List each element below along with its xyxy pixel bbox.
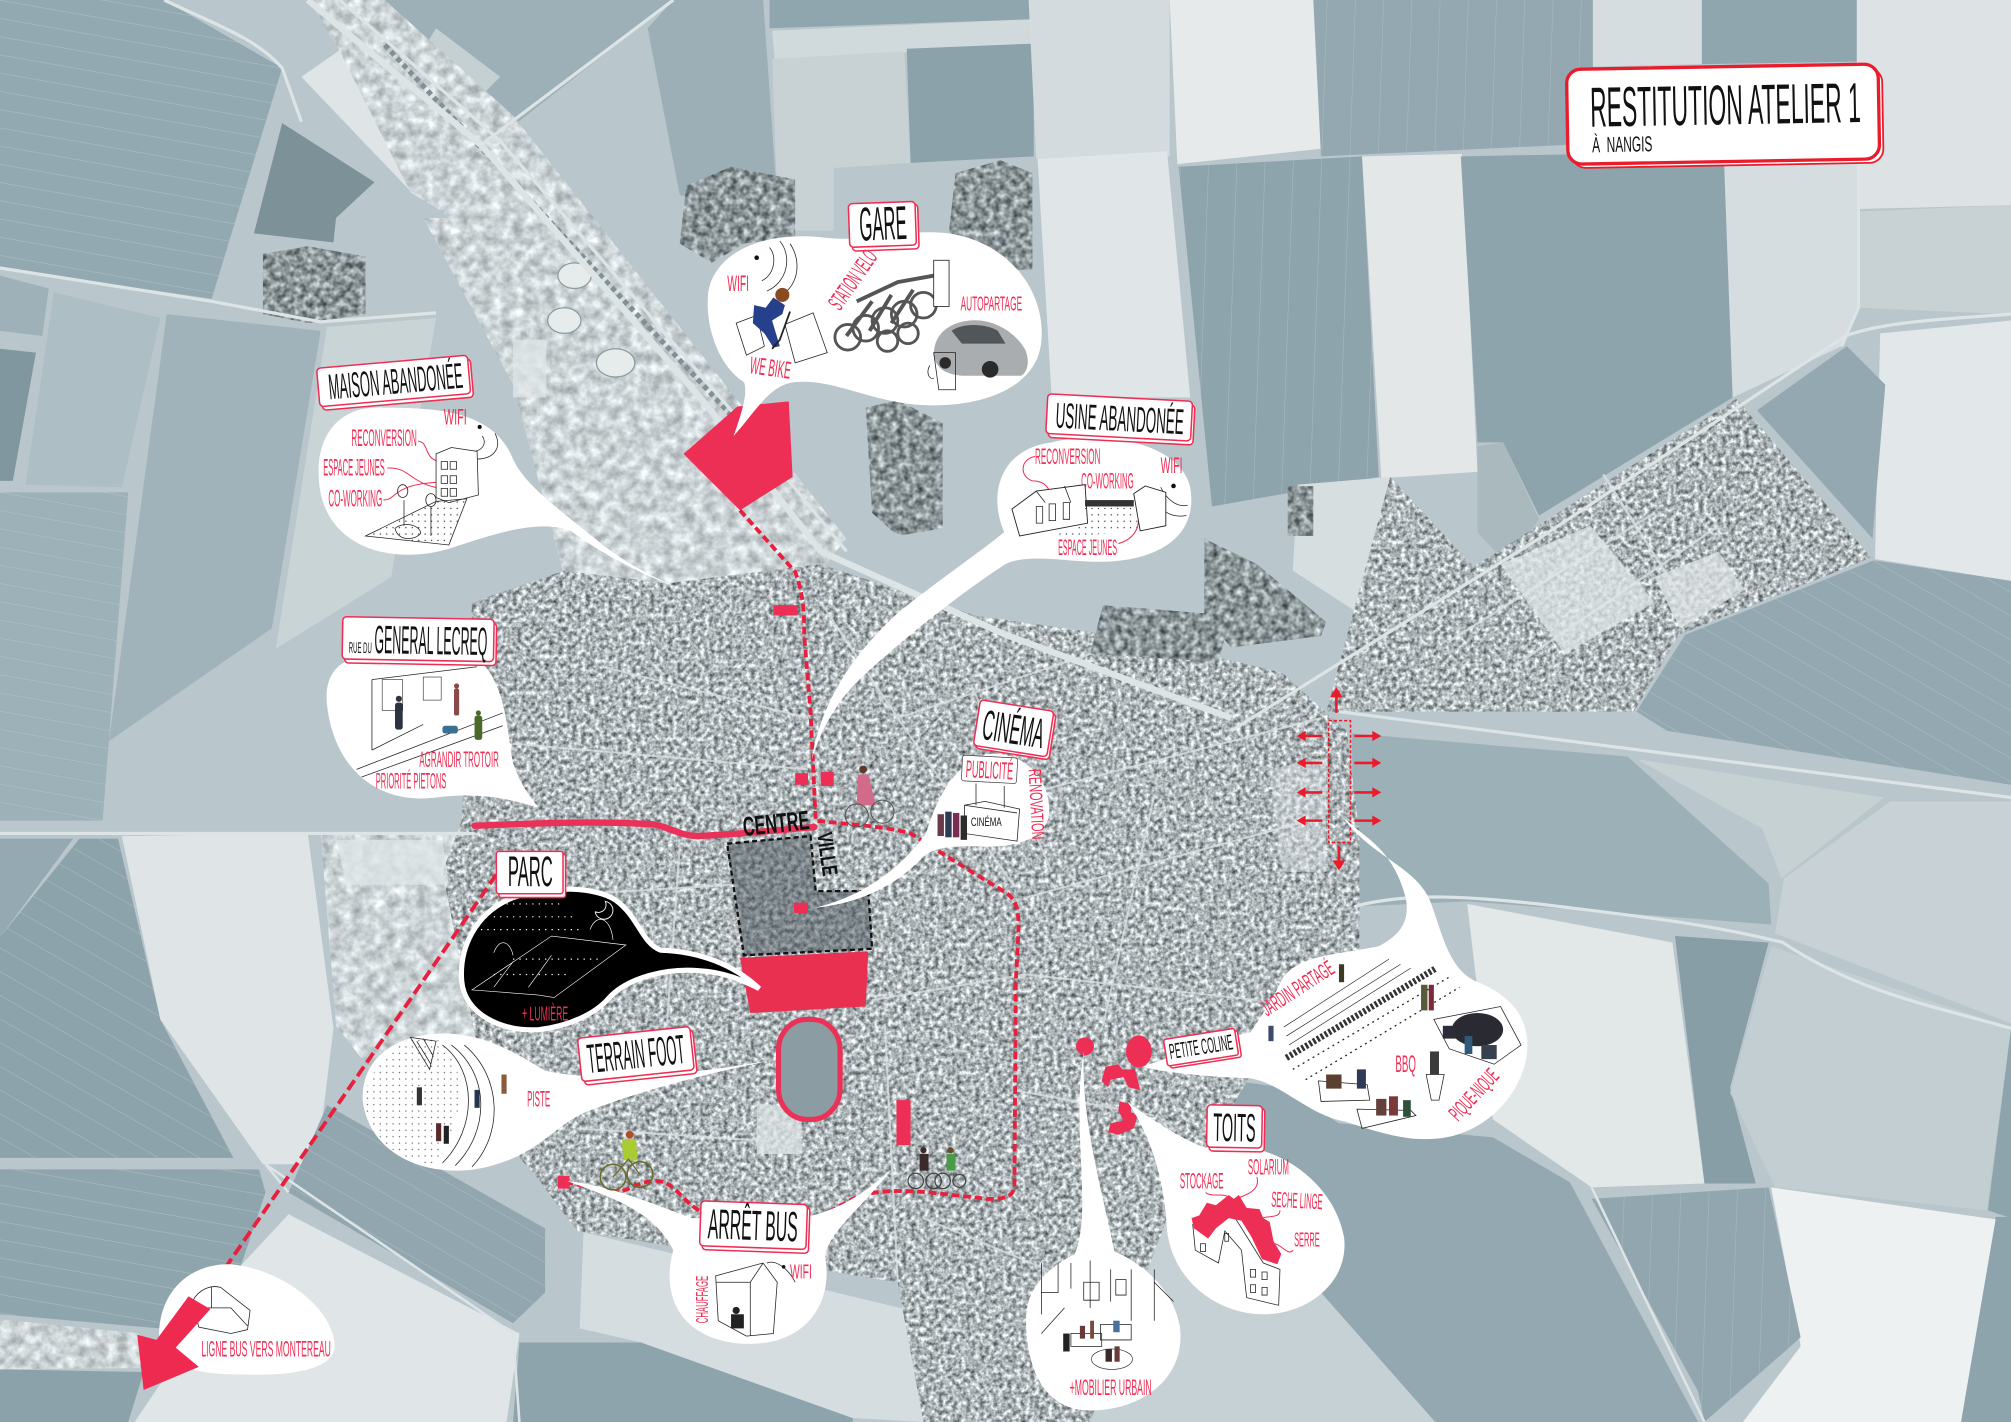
square drawing [1041,1260,1174,1369]
label: arret bus [699,1200,810,1253]
label: parc: PARC [508,848,553,895]
people on urban furniture [1063,1321,1120,1362]
text: maison wifi: WIFI [444,404,467,429]
runners and players [417,1075,507,1144]
panel: rue du general lecreq [327,617,539,808]
bbq stand [1426,1051,1444,1100]
cinema stand drawing [964,783,1020,841]
panel: maison abandonnée: RECONVERSION [351,425,417,452]
red network and sites [218,401,1381,1278]
panel: toits: SERRE [1294,1228,1320,1251]
text: renovation: RENOVATION [1025,769,1048,840]
cyclists pair [908,1147,966,1189]
site: park [740,951,868,1013]
bus drawing [192,1287,250,1334]
panel: arret bus: ARRÊT BUS [707,1200,799,1250]
label: usine [1046,394,1195,445]
label: gare [848,197,919,252]
wifi icon: WIFI [727,271,749,296]
bubble: parc black [461,889,759,1030]
panel: ligne bus [137,1264,335,1390]
panel: gare: WE BIKE [748,352,793,385]
annotations: usine [1023,444,1182,560]
bubble: rue [327,654,539,808]
panel: terrain foot: TERRAIN FOOT [585,1026,687,1082]
roofs on map [1102,1064,1140,1135]
annotations: toits [1180,1155,1323,1252]
bubble: ligne bus [159,1264,335,1375]
annotations: toits: STOCKAGE [1180,1169,1224,1194]
label: terrain [577,1025,697,1085]
annotations: usine: RECONVERSION [1035,444,1100,469]
panel: terrain foot [363,1025,777,1171]
bubble: terrain [363,1033,777,1171]
text: maison wifi [444,404,498,459]
gas tanks [548,263,635,377]
rue du general lecreq thick red street [475,823,814,836]
factory drawing [1012,484,1188,539]
title box: À NANGIS [1592,131,1653,157]
panel: arret bus: CHAUFFAGE [692,1276,712,1323]
red network and sites: VILLE [812,831,843,877]
title box [1566,64,1884,168]
abandoned house drawing [366,448,478,545]
label: cinema [973,700,1056,760]
panel: toits: TOITS [1213,1106,1256,1151]
panel: cinema: PUBLICITÉ [965,756,1014,786]
light rail and station urban texture [0,0,846,1369]
tree clusters [263,160,1326,662]
town and industrial urban texture [442,399,1871,1422]
electric car [934,320,1028,378]
centre ville text: CENTRE [741,805,811,842]
panel: rue du general lecreq: AGRANDIR TROTOIR [419,747,499,772]
panel: jardin partage et petite coline [1143,816,1527,1139]
panel: gare [708,197,1042,436]
bubble: usine [812,438,1191,759]
bubble: jardin [1143,816,1527,1139]
panel: gare: AUTOPARTAGE [961,292,1022,315]
benches groups [1318,1069,1416,1128]
text: LIGNE BUS VERS MONTEREAU [201,1337,331,1362]
panel: jardin partage et petite coline: PETITE COLINE [1167,1029,1235,1064]
panel: toits [1127,1101,1345,1314]
label: rue [342,617,497,666]
panel: mobilier urbain [1026,1051,1181,1410]
bubble: cinema [814,754,1049,908]
panel: cinema [814,700,1056,908]
bubble: mobilier [1026,1051,1181,1410]
text: pique-nique: PIQUE-NIQUE [1444,1063,1504,1125]
label: petite coline [1163,1028,1242,1069]
label: rue: RUE DU [349,640,372,657]
label: parc [496,848,566,898]
panel: usine abandonnée [812,394,1195,759]
red roofs building drawing [1191,1195,1281,1305]
text: CINÉMA [979,701,1048,757]
annotations: maison [323,425,442,512]
bubble: gare [708,232,1042,436]
street drawing [357,667,503,777]
text: rue annotations [376,747,499,794]
text: rue annotations: PRIORITÉ PIETONS [376,769,446,794]
we bike cyclist [736,288,827,363]
site: red rectangle [896,1100,911,1145]
small red markers [558,605,834,1189]
charging post [928,353,955,390]
bubble: toits [1127,1101,1345,1314]
bubble: arret bus [567,1169,891,1344]
night park drawing [472,901,626,998]
annotations: usine: CO-WORKING [1081,469,1134,494]
annotations: usine: ESPACE JEUNES [1058,535,1117,560]
label: toits [1206,1105,1265,1152]
cinema stand drawing: CINÉMA [971,816,1002,829]
text: wifi bus: WIFI [790,1260,812,1283]
cyclist: green shirt [600,1131,653,1190]
petite colline markers [1076,1035,1152,1067]
picnic group [1434,1007,1521,1064]
football drawing [364,1037,507,1167]
site: gare [684,401,793,510]
panel: parc [461,848,759,1030]
gardeners [1268,964,1434,1041]
crowd [938,812,967,840]
text: GENERAL LECREQ [374,618,488,664]
annotations: toits: SOLARIUM [1248,1155,1289,1180]
panel: mobilier urbain: +MOBILIER URBAIN [1070,1375,1152,1400]
panel: maison abandonnée: MAISON ABANDONÉE [327,356,464,407]
label: maison [317,355,474,411]
dashed line to Montereau [218,874,496,1278]
stadium track [778,1019,840,1119]
panel: parc: + LUMIÈRE [522,1003,568,1026]
panel: jardin partage et petite coline: JARDIN PARTAGÉ [1256,955,1339,1021]
panel: arret bus [567,1169,891,1344]
pedestrians [395,696,403,730]
panel: jardin partage et petite coline: BBQ [1395,1051,1416,1078]
publicite sign [961,755,1018,786]
panel: gare: STATION VELO [823,245,882,314]
panel: terrain foot: PISTE [527,1087,550,1112]
town streets [513,474,1719,1282]
cyclist: woman in pink [845,765,894,827]
expansion arrows [1297,687,1381,871]
panel: maison abandonnée [317,355,776,610]
text: USINE ABANDONÉE [1055,396,1185,442]
bus shelter drawing [716,1262,795,1336]
text: SECHE LINGE [1271,1187,1323,1214]
dashed route [740,510,1018,1223]
garden rows drawing [1284,959,1460,1080]
big red arrow [137,1296,210,1390]
annotations: maison: CO-WORKING [328,485,382,512]
panel: gare: GARE [858,197,908,252]
centre-ville dashed zone [727,836,872,955]
light buildings on town [336,340,1744,1154]
bike station [835,260,949,351]
annotations: maison: ESPACE JEUNES [323,455,385,482]
dashed bus stop route [567,1181,699,1210]
wifi icon [727,241,797,297]
bubble: maison [319,407,776,610]
panel: usine abandonnée: WIFI [1161,453,1182,478]
